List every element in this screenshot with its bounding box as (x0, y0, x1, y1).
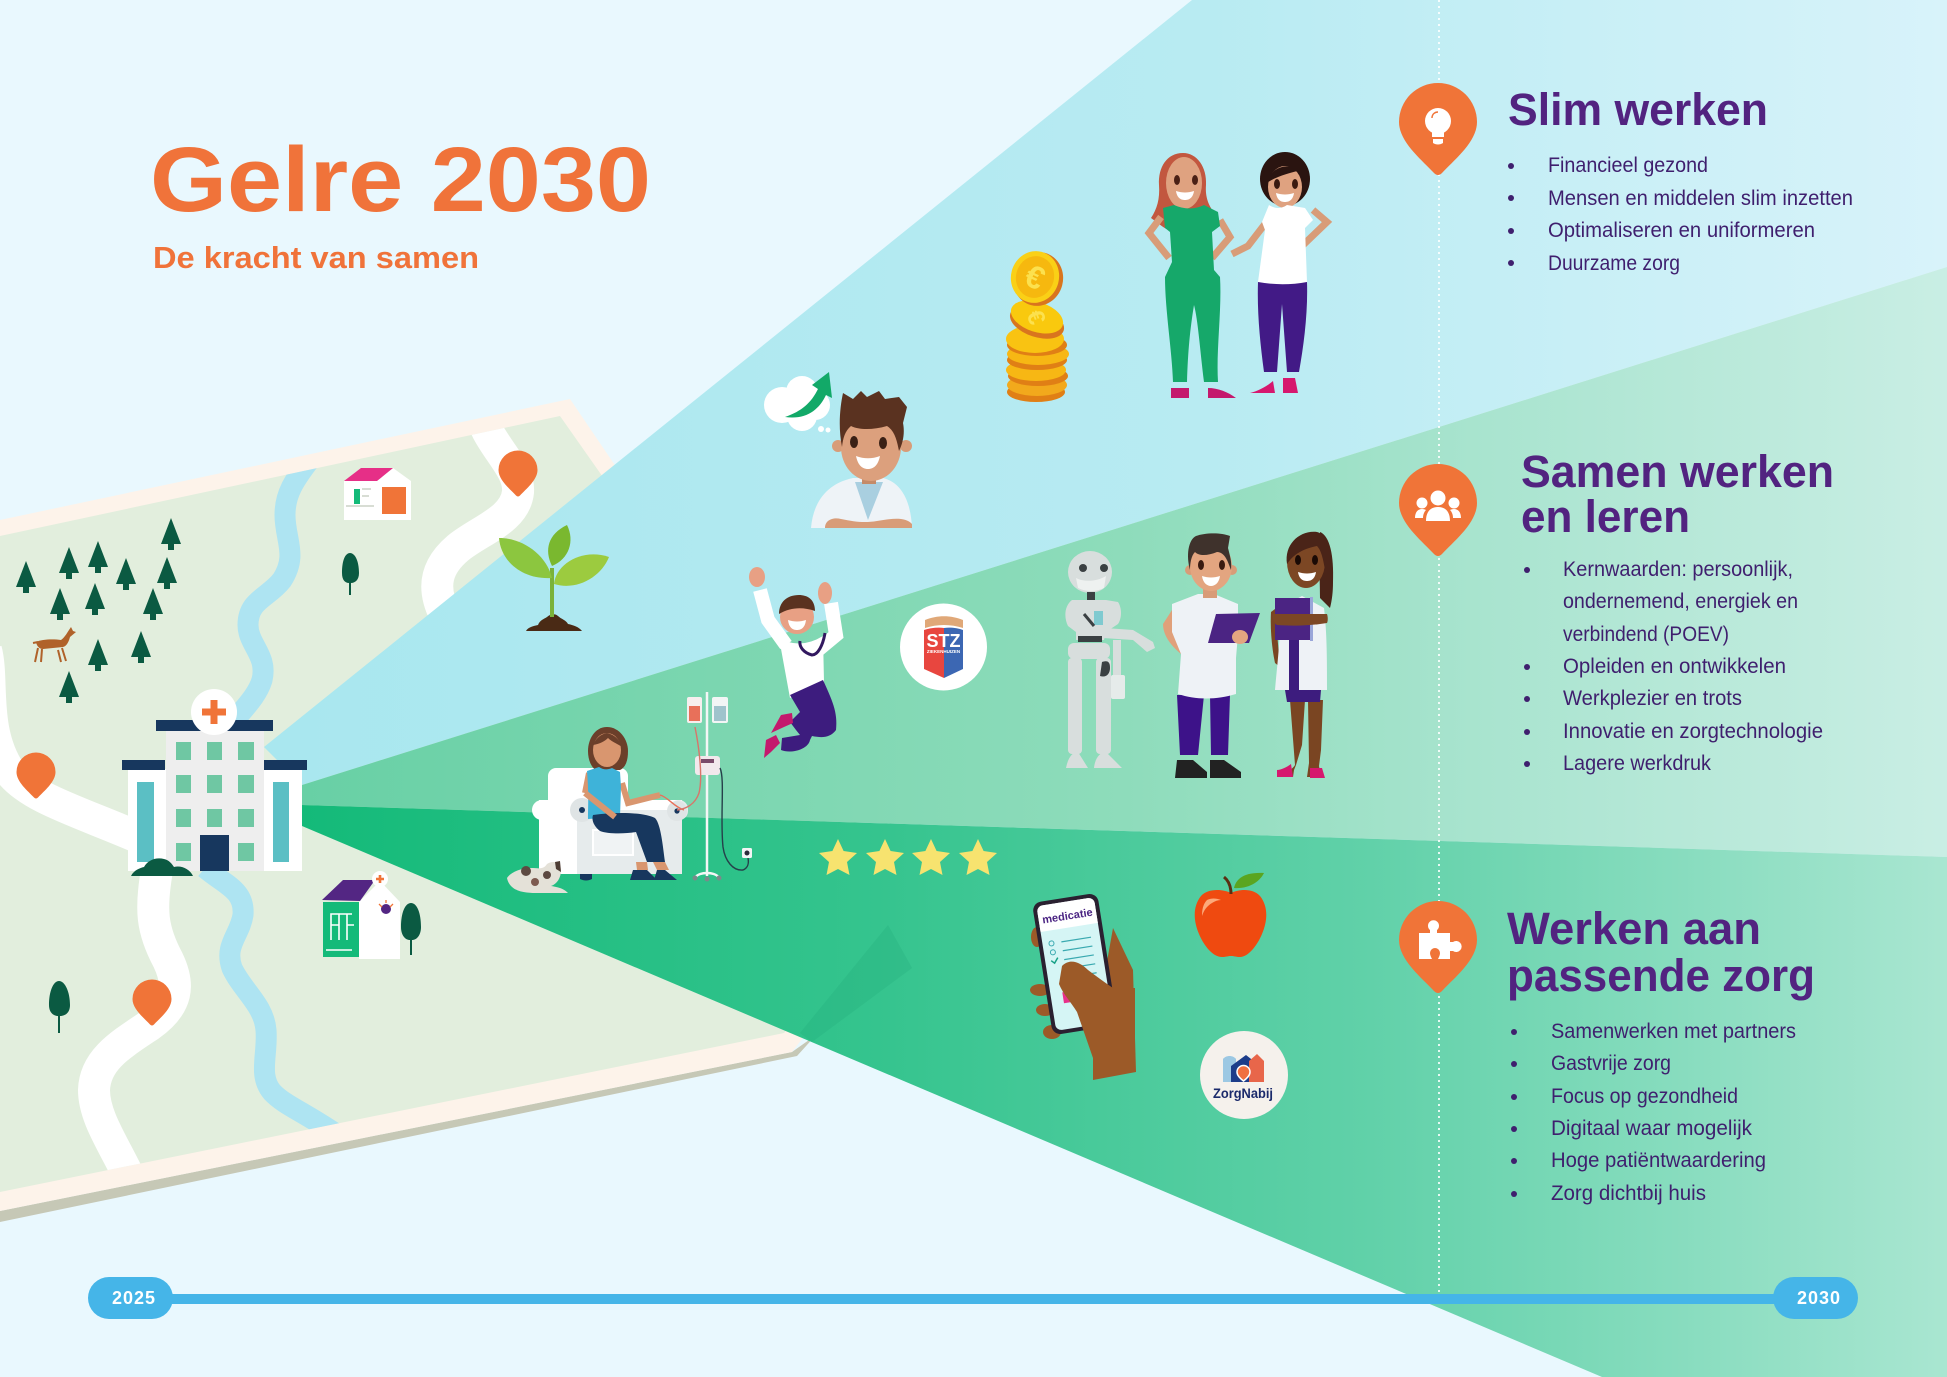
infusion stand (677, 692, 752, 882)
beam: slim werken (264, 0, 1947, 785)
section: werken aan passende zorg (1399, 901, 1815, 1205)
euro coins: € (1019, 257, 1051, 297)
apple (1195, 873, 1266, 957)
end year: 2030 (1797, 1288, 1841, 1308)
end year (1773, 1277, 1858, 1319)
dog (507, 861, 568, 893)
patient in chair (532, 727, 688, 880)
deer (33, 627, 76, 662)
bullet list (1508, 154, 1853, 275)
heading: Werken aan (1507, 903, 1761, 954)
pin icon: people (1399, 464, 1477, 556)
map pin north (498, 450, 538, 496)
bullet list: Kernwaarden: persoonlijk, (1563, 558, 1793, 581)
euro coins: € (1021, 307, 1051, 328)
pin icon: puzzle (1399, 901, 1477, 993)
STZ logo: STZ (926, 631, 961, 651)
map (0, 399, 910, 1222)
bullet list: Mensen en middelen slim inzetten (1548, 187, 1853, 210)
bullet list: Innovatie en zorgtechnologie (1563, 720, 1823, 743)
jumping man (749, 567, 836, 758)
clinic (322, 871, 400, 959)
growth arrow (785, 372, 832, 418)
house top (344, 468, 411, 520)
robot (1065, 551, 1155, 768)
heading: Samen werken (1521, 446, 1834, 497)
woman in green (1149, 153, 1236, 398)
bullet list: verbindend (POEV) (1563, 623, 1729, 646)
plant (499, 525, 609, 631)
beam: samen werken en leren (302, 267, 1947, 857)
bullet list: Samenwerken met partners (1551, 1020, 1796, 1043)
hospital (122, 689, 307, 876)
beam: werken aan passende zorg (302, 805, 1947, 1377)
map pin south (132, 980, 172, 1026)
section: slim werken (1399, 83, 1853, 275)
river (205, 452, 345, 1140)
bullet list: Opleiden en ontwikkelen (1563, 655, 1786, 678)
STZ logo: ZIEKENHUIZEN (927, 649, 960, 654)
timeline (88, 1277, 1858, 1319)
hand with phone (1030, 893, 1136, 1080)
rating stars (819, 839, 997, 875)
start year (88, 1277, 173, 1319)
section: samen werken en leren: en leren (1521, 491, 1690, 542)
bullet list: ondernemend, energiek en (1563, 590, 1798, 613)
bullet list: Gastvrije zorg (1551, 1052, 1671, 1075)
bullet list: Zorg dichtbij huis (1551, 1182, 1706, 1205)
bullet list (1524, 558, 1823, 775)
hand with phone: medicatie (1041, 907, 1093, 926)
trees (49, 553, 421, 1033)
thinking man (764, 372, 912, 528)
woman in white (1232, 152, 1327, 393)
bullet list: Lagere werkdruk (1563, 752, 1711, 775)
bullet list: Focus op gezondheid (1551, 1085, 1738, 1108)
coat (811, 478, 912, 528)
forest (16, 518, 181, 703)
subtitle: De kracht van samen (153, 240, 479, 275)
roads (0, 405, 518, 1190)
section: werken aan passende zorg: passende zorg (1507, 950, 1815, 1001)
pin icon: light bulb (1399, 83, 1477, 175)
ZorgNabij logo: ZorgNabij (1213, 1085, 1273, 1101)
section: samen werken en leren (1399, 446, 1834, 775)
dotted centre line (1438, 0, 1440, 1294)
euro coins (1005, 246, 1069, 402)
start year: 2025 (112, 1288, 156, 1308)
male doctor (1163, 533, 1260, 778)
title: Gelre 2030 (150, 129, 651, 231)
thought cloud (764, 376, 830, 432)
bullet list: Digitaal waar mogelijk (1551, 1117, 1752, 1140)
map corner seen through beam (800, 925, 912, 1042)
bullet list (1511, 1020, 1796, 1205)
female doctor (1271, 532, 1333, 778)
ZorgNabij logo (1200, 1031, 1288, 1119)
bullet list: Financieel gezond (1548, 154, 1708, 177)
bullet list: Hoge patiëntwaardering (1551, 1149, 1766, 1172)
map pin west (16, 752, 56, 798)
bullet list: Werkplezier en trots (1563, 687, 1742, 710)
heading: Slim werken (1508, 84, 1768, 135)
bullet list: Duurzame zorg (1548, 252, 1680, 275)
bullet list: Optimaliseren en uniformeren (1548, 219, 1815, 242)
STZ logo (900, 604, 987, 690)
